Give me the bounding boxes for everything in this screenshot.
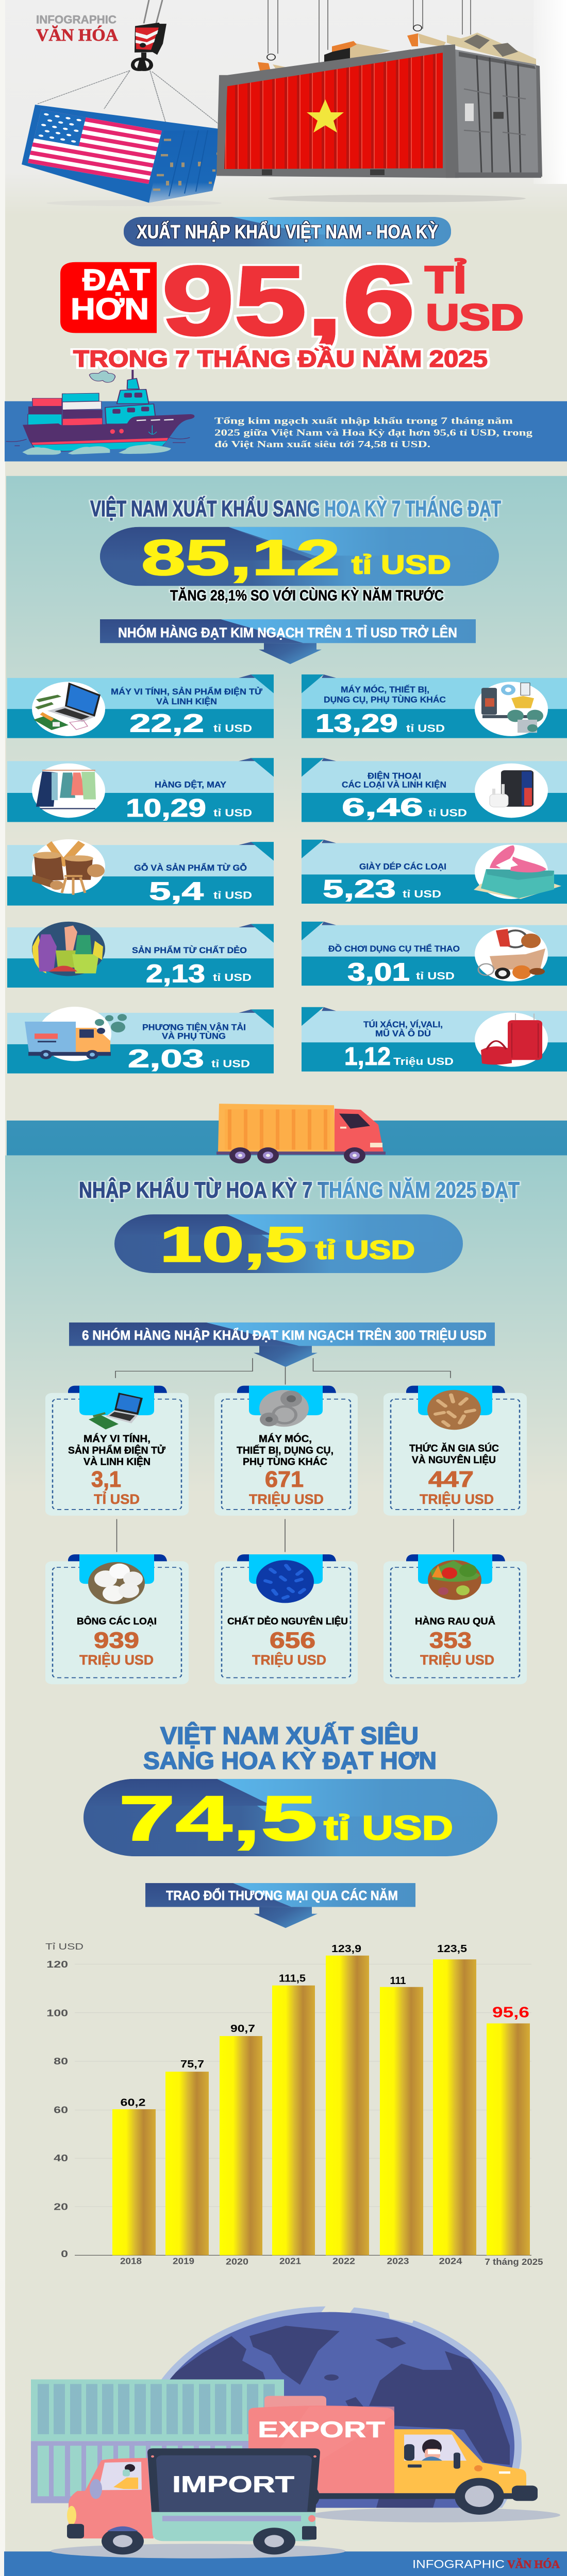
card: phones: ĐIỆN THOẠI (368, 770, 421, 781)
card: vehicles (7, 1007, 274, 1073)
pill: 10,5 tỉ USD: 10,5 (160, 1217, 307, 1273)
pill: 74,5 tỉ USD: 74,5 (119, 1783, 318, 1854)
bar chart: trade 2018-2025 (45, 1942, 543, 2267)
illustration: export and import trucks (4, 2304, 567, 2576)
icon: plastic products (32, 922, 105, 976)
bars (112, 1956, 530, 2255)
section background: exports (6, 476, 567, 840)
heading bar with arrow: trade by year: TRAO ĐỔI THƯƠNG MẠI QUA CÁC NĂM (166, 1887, 398, 1903)
heading: trade surplus: SANG HOA KỲ ĐẠT HƠN (143, 1747, 437, 1774)
US flag panel (28, 110, 162, 184)
icon: sports box (475, 927, 548, 981)
card: wood: GỖ VÀ SẢN PHẨM TỪ GỖ (134, 862, 247, 873)
globe (138, 2304, 522, 2508)
star (307, 99, 344, 132)
flag container USA (22, 105, 227, 202)
icon: gears (259, 1390, 309, 1427)
card: footwear: GIÀY DÉP CÁC LOẠI (359, 862, 446, 872)
card: bags (302, 1007, 567, 1072)
value labels: 123,5 (437, 1943, 467, 1955)
export truck (248, 2396, 538, 2515)
value labels: 90,7 (230, 2023, 255, 2035)
intro paragraph: đó Việt Nam xuất siêu tới 74,58 tỉ USD. (214, 439, 430, 449)
card: toys and sports: tỉ USD (416, 970, 455, 982)
card: machinery: 13,29 (315, 709, 398, 738)
import card: vegetables: TRIỆU USD (420, 1652, 494, 1668)
pill: 85,12 tỉ USD (100, 527, 499, 586)
card: machinery: MÁY MÓC, THIẾT BỊ, (341, 684, 429, 694)
import card: animal feed: 447 (428, 1467, 474, 1492)
stacked containers (31, 2379, 284, 2503)
card: textiles: 10,29 (126, 794, 206, 822)
band: imports divider (7, 1121, 567, 1156)
y axis labels: 120 (46, 1959, 68, 1970)
pill: 85,12 tỉ USD: tỉ USD (352, 550, 451, 579)
card: computers: VÀ LINH KIỆN (156, 696, 217, 706)
x axis labels: 2018 (120, 2256, 142, 2266)
import card: cotton: TRIỆU USD (79, 1652, 154, 1668)
card: vehicles: VÀ PHỤ TÙNG (162, 1030, 226, 1041)
driver (422, 2439, 442, 2461)
icon: clothes rack (32, 764, 105, 818)
y axis labels: 40 (54, 2153, 68, 2163)
import card: animal feed (383, 1386, 527, 1516)
x axis labels (120, 2256, 543, 2267)
container doors (455, 49, 541, 178)
import card: machinery: TRIỆU USD (249, 1491, 324, 1507)
x axis labels: 2022 (332, 2256, 355, 2266)
icon: shoes on box (474, 844, 561, 899)
heading bar with arrow: trade by year (145, 1883, 415, 1928)
export truck: EXPORT (258, 2417, 385, 2442)
value labels: 75,7 (180, 2058, 204, 2070)
x axis labels: 2020 (226, 2257, 248, 2266)
heading bar with arrow: import groups (69, 1323, 495, 1367)
badge: đạt hơn: HƠN (71, 292, 149, 326)
blue intro band (5, 370, 567, 462)
card: computers: tỉ USD (213, 723, 252, 735)
connector lines (115, 1358, 454, 1552)
import card: vegetables: HÀNG RAU QUẢ (415, 1616, 495, 1626)
import card: machinery: 671 (265, 1467, 304, 1492)
icon: laptop (89, 1393, 143, 1429)
x axis labels: 2023 (387, 2256, 409, 2266)
x axis labels: 2024 (439, 2256, 462, 2266)
import card: computers (45, 1386, 189, 1516)
import card: machinery (214, 1386, 358, 1516)
y axis labels: 0 (61, 2248, 68, 2259)
import card: plastic materials: TRIỆU USD (252, 1652, 326, 1668)
pill: 10,5 tỉ USD (114, 1214, 463, 1273)
icon: cargo ship (6, 370, 194, 455)
import card: machinery: MÁY MÓC, (259, 1433, 312, 1444)
container body (216, 45, 455, 178)
import card: animal feed: TRIỆU USD (420, 1491, 494, 1507)
hero illustration: containers on cranes (5, 0, 567, 215)
headline: trong 7 tháng đầu năm 2025: TRONG 7 THÁNG ĐẦU NĂM 2025 (73, 346, 488, 372)
import card: computers: SẢN PHẨM ĐIỆN TỬ (68, 1445, 165, 1456)
import card: cotton (45, 1554, 189, 1684)
crane cables (144, 0, 471, 64)
headline number 95,6 tỉ USD: TỈ (425, 258, 466, 301)
badge: đạt hơn (60, 262, 157, 333)
card: plastics: 2,13 (146, 960, 205, 988)
pill: 10,5 tỉ USD: tỉ USD (315, 1235, 415, 1264)
card: plastics: SẢN PHẨM TỪ CHẤT DẺO (132, 945, 247, 955)
heading: trade surplus (143, 1722, 437, 1774)
icon: suitcase and bag (475, 1012, 548, 1067)
pill: 85,12 tỉ USD: 85,12 (141, 530, 340, 586)
icon: wood logs (32, 839, 105, 895)
logo: Infographic Văn Hóa (36, 13, 118, 44)
card: textiles: HÀNG DỆT, MAY (155, 779, 226, 790)
import card: computers: TỈ USD (94, 1491, 140, 1507)
card: wood: tỉ USD (213, 890, 252, 901)
shadows (311, 2508, 560, 2522)
intro paragraph: 2025 giữa Việt Nam và Hoa Kỳ đạt hơn 95,6 tỉ USD, trong (214, 428, 532, 438)
headline number 95,6 tỉ USD: 95,6 (162, 246, 415, 355)
bar chart: trade 2018-2025: Tỉ USD (45, 1942, 84, 1952)
card: footwear (302, 840, 567, 904)
bottom blue band (4, 2551, 567, 2576)
icon: cotton (88, 1562, 145, 1604)
top tan block (447, 32, 536, 66)
headline number 95,6 tỉ USD: USD (426, 296, 524, 338)
import card: computers: VÀ LINH KIỆN (84, 1456, 151, 1467)
card: textiles (7, 758, 274, 822)
card: machinery: tỉ USD (406, 723, 445, 735)
y axis labels: 60 (54, 2105, 68, 2115)
import card: vegetables (383, 1554, 527, 1684)
card: machinery: DỤNG CỤ, PHỤ TÙNG KHÁC (324, 694, 446, 705)
icon: machinery (475, 682, 548, 736)
left margin strip (0, 0, 5, 2576)
card: vehicles: PHƯƠNG TIỆN VẬN TẢI (142, 1022, 246, 1032)
card: wood: 5,4 (149, 877, 204, 905)
icon: smartphones and earbuds (475, 764, 548, 818)
import card: computers: 3,1 (91, 1467, 121, 1492)
icon: feed pellets (427, 1390, 481, 1430)
card: textiles: tỉ USD (213, 807, 252, 819)
card: plastics (7, 922, 274, 988)
pill: 74,5 tỉ USD (84, 1779, 497, 1856)
card: phones: 6,46 (342, 793, 423, 822)
card: toys and sports: ĐỒ CHƠI DỤNG CỤ THỂ THAO (328, 943, 460, 954)
card: computers: MÁY VI TÍNH, SẢN PHẨM ĐIỆN TỬ (111, 686, 263, 697)
import card: machinery: THIẾT BỊ, DỤNG CỤ, (237, 1445, 333, 1456)
heading: trade surplus: VIỆT NAM XUẤT SIÊU (160, 1722, 419, 1749)
y axis labels: 80 (54, 2056, 68, 2066)
import card: cotton: BÔNG CÁC LOẠI (77, 1616, 157, 1626)
value labels: 123,9 (331, 1943, 361, 1955)
import card: plastic materials (214, 1554, 358, 1684)
crane hook block (131, 23, 166, 71)
card: machinery (302, 674, 567, 738)
intro paragraph (214, 416, 532, 449)
footer logo: INFOGRAPHIC (412, 2557, 505, 2570)
icon: delivery truck (25, 1007, 127, 1061)
card: bags: MŨ VÀ Ô DÙ (375, 1028, 431, 1039)
card: vehicles: 2,03 (128, 1045, 204, 1073)
card: toys and sports (302, 922, 567, 986)
value labels: 95,6 (492, 2005, 529, 2021)
import card: computers: MÁY VI TÍNH, (84, 1433, 151, 1444)
y axis labels: 100 (46, 2007, 68, 2018)
import card: cotton: 939 (94, 1628, 139, 1653)
flag container Vietnam (216, 25, 542, 178)
import truck: IMPORT (172, 2471, 294, 2497)
icon: blue plastic pellets (256, 1560, 314, 1603)
section background: imports (5, 1156, 567, 1493)
card: bags: Triệu USD (393, 1056, 454, 1067)
import card: animal feed: VÀ NGUYÊN LIỆU (412, 1454, 496, 1465)
card: wood (7, 839, 274, 906)
value labels (121, 1943, 529, 2108)
card: plastics: tỉ USD (213, 972, 252, 984)
logo: Infographic Văn Hóa: INFOGRAPHIC (36, 13, 116, 26)
logo: Infographic Văn Hóa: VĂN HÓA (36, 25, 118, 44)
icon: orange truck (216, 1104, 386, 1163)
card: footwear: tỉ USD (403, 888, 441, 900)
icon: vegetable basket (428, 1560, 481, 1600)
y axis labels: 20 (54, 2201, 68, 2212)
import card: animal feed: THỨC ĂN GIA SÚC (409, 1443, 499, 1454)
value labels: 111,5 (279, 1973, 306, 1984)
card: phones: CÁC LOẠI VÀ LINH KIỆN (342, 779, 446, 790)
value labels: 111 (390, 1975, 406, 1987)
x axis labels: 2021 (279, 2256, 301, 2266)
card: phones (302, 758, 567, 822)
import truck (67, 2448, 320, 2554)
import card: plastic materials: 656 (270, 1628, 315, 1653)
card: computers (7, 674, 274, 738)
card: vehicles: tỉ USD (211, 1058, 250, 1070)
import card: vegetables: 353 (429, 1628, 472, 1653)
intro paragraph: Tổng kim ngạch xuất nhập khẩu trong 7 tháng năm (214, 416, 513, 426)
card: computers: 22,2 (129, 709, 204, 738)
shadow under containers (268, 195, 526, 202)
card: toys and sports: 3,01 (347, 958, 410, 986)
import card: plastic materials: CHẤT DẺO NGUYÊN LIỆU (227, 1616, 348, 1626)
card: bags: 1,12 (344, 1042, 391, 1071)
value labels: 60,2 (121, 2097, 145, 2108)
spreader beams (298, 49, 412, 71)
card: phones: tỉ USD (428, 807, 467, 819)
chains (38, 71, 225, 129)
x axis labels: 2019 (173, 2256, 194, 2266)
import card: machinery: PHỤ TÙNG KHÁC (243, 1456, 327, 1467)
pill: subject title (124, 217, 451, 246)
icon: laptop and circuit boards (32, 682, 105, 736)
card: bags: TÚI XÁCH, VÍ,VALI, (363, 1019, 443, 1029)
badge: đạt hơn: ĐẠT (82, 263, 150, 297)
x axis labels: 7 tháng 2025 (485, 2257, 543, 2267)
pill: 74,5 tỉ USD: tỉ USD (324, 1809, 453, 1847)
card: footwear: 5,23 (323, 875, 396, 903)
y axis labels (46, 1959, 68, 2259)
heading bar with arrow: export groups (100, 619, 476, 664)
